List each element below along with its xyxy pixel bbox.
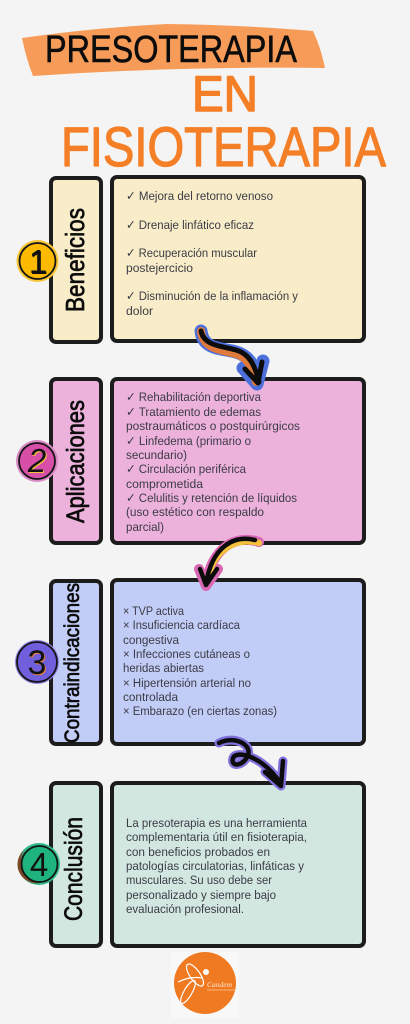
content box: conclusion text: complementaria útil en fisioterapia, <box>126 830 307 844</box>
content box: contraindicaciones list: congestiva <box>123 633 179 647</box>
number badge 2: 2 <box>27 442 46 479</box>
number badge 4 <box>17 843 60 885</box>
label tab: Beneficios: Beneficios <box>60 208 90 312</box>
panel: conclusion <box>17 783 364 946</box>
label tab: Aplicaciones: Aplicaciones <box>62 400 90 523</box>
number badge 1 <box>16 240 58 282</box>
content box: beneficios list: ✓ Drenaje linfático eficaz <box>126 218 254 232</box>
content box: aplicaciones list: ✓ Circulación periférica <box>126 462 246 476</box>
panel: beneficios <box>16 177 364 342</box>
label tab: Contraindicaciones: Contraindicaciones <box>61 583 84 743</box>
panel: aplicaciones <box>16 379 364 543</box>
label tab: Conclusión <box>51 783 101 946</box>
content box: conclusion text: musculares. Su uso debe ser <box>126 873 272 887</box>
logo <box>171 952 239 1018</box>
number badge 3: 3 <box>29 645 47 683</box>
content box: beneficios list: postejercicio <box>126 261 193 275</box>
arrow: contraindicaciones to conclusion <box>219 740 283 786</box>
arrow: beneficios to aplicaciones <box>201 331 263 384</box>
content box: beneficios list: ✓ Disminución de la inflamación y <box>126 289 299 303</box>
content box: beneficios list: dolor <box>126 304 153 318</box>
content box: aplicaciones list: ✓ Tratamiento de edemas <box>126 405 261 419</box>
logo wordmark: Candem <box>207 980 233 989</box>
label tab: Beneficios <box>51 178 101 342</box>
content box: aplicaciones list: ✓ Rehabilitación deportiva <box>126 390 261 404</box>
title highlight brush <box>22 24 325 76</box>
content box: beneficios list: ✓ Recuperación muscular <box>126 246 257 260</box>
logo figure mark <box>178 961 209 1005</box>
content box: aplicaciones list: secundario) <box>126 448 187 462</box>
content box: conclusion text: patologías circulatorias, linfáticas y <box>126 859 305 873</box>
content box: aplicaciones list: ✓ Celulitis y retención de líquidos <box>126 491 297 505</box>
panel: contraindicaciones <box>15 580 364 744</box>
content box: conclusion text <box>112 783 364 946</box>
content box: aplicaciones list: ✓ Linfedema (primario o <box>126 434 251 448</box>
content box: conclusion text: con beneficios probados en <box>126 845 270 859</box>
content box: aplicaciones list: comprometida <box>126 477 203 491</box>
content box: contraindicaciones list: × Insuficiencia cardíaca <box>123 618 240 632</box>
label tab: Aplicaciones <box>51 379 101 543</box>
number badge 4: 4 <box>30 846 48 883</box>
content box: conclusion text: personalizado y siempre bajo <box>126 888 276 902</box>
label tab: Conclusión: Conclusión <box>60 817 88 921</box>
content box: aplicaciones list: parcial) <box>126 520 164 534</box>
content box: aplicaciones list <box>112 379 364 543</box>
title <box>22 24 387 178</box>
content box: contraindicaciones list: heridas abiertas <box>123 661 204 675</box>
content box: aplicaciones list: (uso estético con respaldo <box>126 505 264 519</box>
content box: contraindicaciones list: × Hipertensión arterial no <box>123 676 251 690</box>
content box: contraindicaciones list: × Embarazo (en ciertas zonas) <box>123 704 277 718</box>
title line: EN: EN <box>192 66 258 122</box>
content box: beneficios list: ✓ Mejora del retorno venoso <box>126 189 273 203</box>
number badge 3 <box>15 640 59 684</box>
arrow: aplicaciones to contraindicaciones <box>199 539 259 586</box>
number badge 1: 1 <box>29 243 47 280</box>
content box: aplicaciones list: postraumáticos o postquirúrgicos <box>126 419 300 433</box>
label tab: Contraindicaciones <box>51 581 101 744</box>
number badge 1: 1 <box>30 244 48 281</box>
title line: PRESOTERAPIA: PRESOTERAPIA <box>45 29 298 71</box>
number badge 3: 3 <box>28 644 46 682</box>
number badge 2: 2 <box>28 443 47 480</box>
number badge 2 <box>16 440 58 482</box>
content box: beneficios list <box>112 177 364 341</box>
content box: contraindicaciones list: × Infecciones cutáneas o <box>123 647 250 661</box>
content box: contraindicaciones list <box>112 580 364 744</box>
content box: conclusion text: evaluación profesional. <box>126 902 244 916</box>
content box: contraindicaciones list: × TVP activa <box>123 604 184 618</box>
content box: conclusion text: La presoterapia es una herramienta <box>126 816 307 830</box>
content box: contraindicaciones list: controlada <box>123 690 178 704</box>
